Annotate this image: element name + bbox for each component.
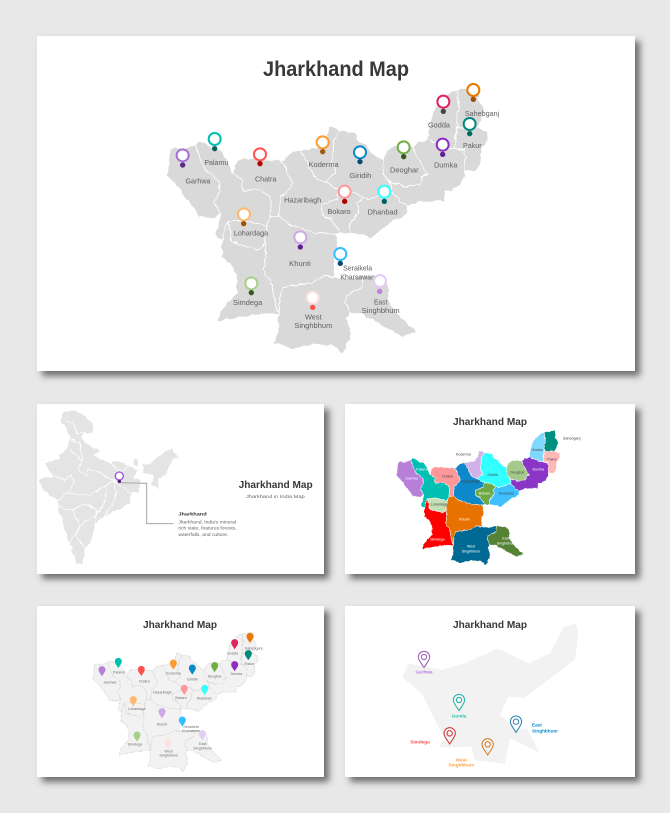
label: Simdega: Simdega xyxy=(410,739,430,744)
label: Gumla: Gumla xyxy=(452,713,467,718)
district location pins xyxy=(177,84,479,310)
district labels: Seraikela xyxy=(343,264,373,273)
panel: main pinned map slide xyxy=(37,36,635,371)
district labels: Godda xyxy=(428,120,451,129)
district labels: Deoghar xyxy=(510,470,525,474)
district labels: Palamu xyxy=(113,671,125,675)
panel: simplified outline map slide xyxy=(345,606,635,777)
district labels: Dhanbad xyxy=(368,208,398,217)
district labels: Singhbhum xyxy=(294,321,332,330)
district labels: Hazaribagh xyxy=(284,196,321,205)
pin: West Singhbhum xyxy=(482,739,493,755)
title: Jharkhand Map xyxy=(263,58,409,81)
callout text: waterfalls, and culture. xyxy=(178,532,228,537)
callout text: rich state, features forests, xyxy=(178,526,237,531)
pin: Garhwa xyxy=(418,651,430,668)
district labels: Chatra xyxy=(139,679,151,683)
pin: East Singhbhum xyxy=(510,716,522,732)
district labels: Sahebganj xyxy=(465,109,499,118)
Jharkhand pin xyxy=(115,472,123,483)
district labels: Palamu xyxy=(416,468,429,472)
title: Jharkhand Map xyxy=(453,619,527,631)
district labels: Kharsawan xyxy=(182,729,200,733)
district labels: Dhanbad xyxy=(197,696,211,700)
district labels: East xyxy=(374,297,388,306)
district labels: Singhbhum xyxy=(159,754,178,758)
district labels: East xyxy=(199,742,206,746)
panel: light map with filled pins slide xyxy=(37,606,324,777)
district labels: Sahebganj xyxy=(245,646,263,650)
callout text xyxy=(178,511,237,537)
district labels: Simdega xyxy=(233,298,263,307)
district labels: West xyxy=(305,312,322,321)
simplified Jharkhand shape xyxy=(402,623,578,764)
district labels: Khunti xyxy=(157,722,167,726)
district labels: Sahebganj xyxy=(563,437,581,441)
district map xyxy=(167,87,488,354)
district labels: Dumka xyxy=(533,468,545,472)
district labels: Singhbhum xyxy=(362,306,400,315)
panel: coloured district map slide xyxy=(345,404,635,574)
district labels: Hazaribagh xyxy=(153,690,172,694)
label: West Singhbhum: West xyxy=(456,757,467,762)
district labels: West xyxy=(467,545,475,549)
district labels: Koderma xyxy=(456,452,472,456)
district labels: Chatra xyxy=(442,475,454,479)
district labels: Garhwa xyxy=(104,680,117,684)
district labels: East xyxy=(502,537,510,541)
district labels xyxy=(104,646,263,758)
district labels: Giridih xyxy=(487,473,498,477)
title: Jharkhand Map xyxy=(453,416,527,428)
district labels: Seraikela xyxy=(183,725,200,729)
district labels: Singhbhum xyxy=(497,542,515,546)
title: Jharkhand Map xyxy=(143,619,217,631)
district labels xyxy=(405,437,581,553)
district labels: Bokaro xyxy=(175,696,187,700)
district labels: Singhbhum xyxy=(193,746,212,750)
district labels: Khunti xyxy=(289,259,311,268)
heading: Jharkhand Map xyxy=(239,480,313,491)
district labels: Palamu xyxy=(204,158,228,167)
district labels: Godda xyxy=(532,448,543,452)
coloured districts xyxy=(397,431,560,565)
district labels: Giridih xyxy=(349,171,371,180)
pin: Simdega xyxy=(444,728,455,744)
district labels: Deoghar xyxy=(390,166,419,175)
district labels: Garhwa xyxy=(405,477,419,481)
subheading: Jharkhand in India Map xyxy=(246,494,305,500)
district labels: Pakur xyxy=(547,458,558,462)
India map xyxy=(38,410,178,565)
district labels: Lohardaga xyxy=(128,707,146,711)
light district map xyxy=(93,632,258,771)
panel: Jharkhand in India map slide xyxy=(37,404,324,574)
district labels: Koderma xyxy=(166,672,182,676)
connector line to callout xyxy=(119,483,173,524)
district labels: Dumka xyxy=(231,672,243,676)
district labels: Simdega xyxy=(128,742,143,746)
district labels: Hazaribagh xyxy=(461,480,480,484)
callout text: Jharkhand xyxy=(178,511,207,517)
district labels: Singhbhum xyxy=(462,549,480,553)
district labels: Khunti xyxy=(459,518,470,522)
district labels: Kharsawan xyxy=(340,272,375,281)
district labels: West xyxy=(165,749,173,753)
district labels: Chatra xyxy=(255,174,277,183)
district labels: Garhwa xyxy=(185,177,211,186)
label: West Singhbhum: Singhbhum xyxy=(449,763,474,768)
district labels: Lohardaga xyxy=(431,502,449,506)
district labels: Lohardaga xyxy=(234,229,269,238)
district labels xyxy=(185,109,499,330)
district labels: Deoghar xyxy=(208,675,222,679)
district labels: Koderma xyxy=(309,160,339,169)
district labels: Bokaro xyxy=(479,491,490,495)
district labels: Simdega xyxy=(430,538,446,542)
filled drop pins xyxy=(98,633,254,749)
district labels: Pakur xyxy=(245,662,255,666)
district labels: Dumka xyxy=(434,160,458,169)
district labels: Pakur xyxy=(463,141,482,150)
label: East Singhbhum xyxy=(532,723,558,733)
label: West Singhbhum xyxy=(449,757,474,768)
district labels: Bokaro xyxy=(327,207,351,216)
label: East Singhbhum: East xyxy=(532,723,542,728)
callout text: Jharkhand, India's mineral xyxy=(178,520,236,525)
label: Garhwa: Garhwa xyxy=(415,670,433,675)
label: East Singhbhum: Singhbhum xyxy=(532,728,558,733)
district labels: Dhanbad xyxy=(499,492,514,496)
district labels: Godda xyxy=(227,652,239,656)
district labels: Giridih xyxy=(187,678,198,682)
pin: Gumla xyxy=(453,694,465,711)
map with district pins and labels xyxy=(167,84,499,354)
